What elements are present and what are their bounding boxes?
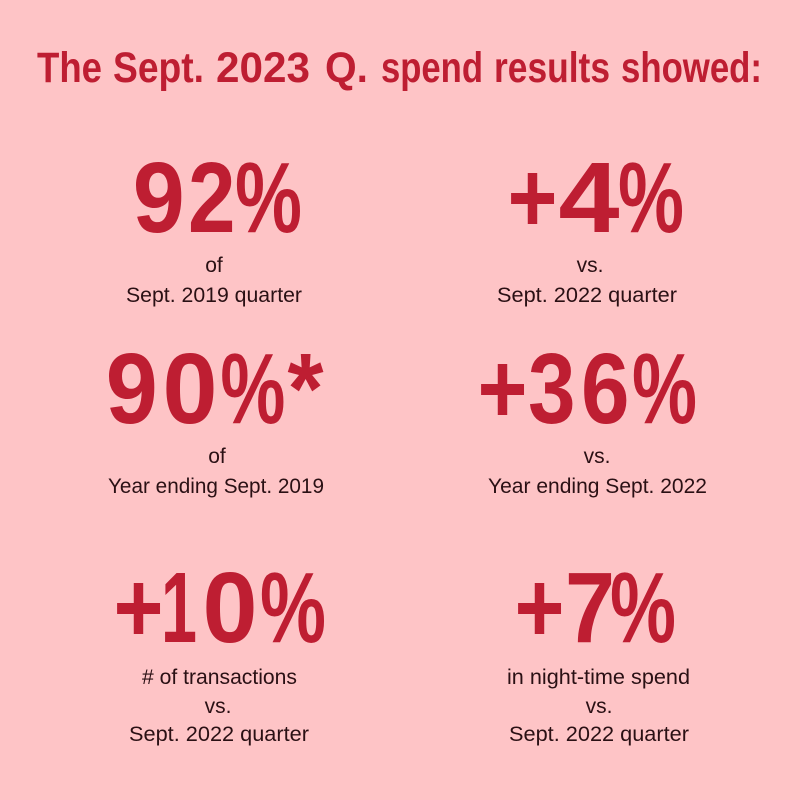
stat: +36% vs. Year ending Sept. 2022: % — [632, 333, 697, 445]
title: results — [494, 44, 610, 92]
title: showed: — [621, 44, 762, 92]
stat: 92% of Sept. 2019 quarter: of — [205, 254, 223, 277]
stat: 90%* of Year ending Sept. 2019: of — [208, 445, 226, 468]
stat: +4% vs. Sept. 2022 quarter: vs. — [577, 254, 603, 277]
stat: +7% in night-time spend vs. Sept. 2022 quarter — [507, 552, 690, 746]
stat: +10% # of transactions vs. Sept. 2022 quarter: vs. — [205, 695, 231, 718]
stat: 90%* of Year ending Sept. 2019: % — [220, 333, 285, 445]
stat: 90%* of Year ending Sept. 2019: Year ending Sept. 2019 — [108, 475, 324, 498]
stat: +10% # of transactions vs. Sept. 2022 quarter — [114, 552, 326, 746]
stat: +7% in night-time spend vs. Sept. 2022 quarter: in night-time spend — [507, 666, 690, 689]
title: Sept. — [113, 44, 204, 92]
stat: +10% # of transactions vs. Sept. 2022 quarter: % — [260, 552, 326, 664]
stat: 90%* of Year ending Sept. 2019: 0 — [162, 333, 218, 445]
stat: 92% of Sept. 2019 quarter: 2 — [188, 142, 236, 254]
stat: +7% in night-time spend vs. Sept. 2022 quarter: + — [514, 552, 564, 664]
stat: +7% in night-time spend vs. Sept. 2022 quarter: Sept. 2022 quarter — [509, 723, 689, 746]
stat: +36% vs. Year ending Sept. 2022: 6 — [581, 333, 630, 445]
stat: +4% vs. Sept. 2022 quarter: 4 — [558, 142, 620, 254]
stat: +4% vs. Sept. 2022 quarter: Sept. 2022 quarter — [497, 284, 677, 307]
stat: +10% # of transactions vs. Sept. 2022 quarter: 1 — [161, 552, 197, 664]
stat: 92% of Sept. 2019 quarter: Sept. 2019 quarter — [126, 284, 302, 307]
title: 2023 — [216, 44, 310, 92]
stat: 90%* of Year ending Sept. 2019 — [106, 333, 324, 498]
stat: 92% of Sept. 2019 quarter: % — [235, 142, 302, 254]
stat: +7% in night-time spend vs. Sept. 2022 quarter: 7 — [565, 552, 615, 664]
stat: 90%* of Year ending Sept. 2019: * — [288, 333, 324, 445]
stat: +7% in night-time spend vs. Sept. 2022 quarter: vs. — [586, 695, 612, 718]
title — [37, 44, 762, 92]
stat: +36% vs. Year ending Sept. 2022: vs. — [584, 445, 610, 468]
stat: +10% # of transactions vs. Sept. 2022 quarter: 0 — [202, 552, 258, 664]
title: Q. — [325, 44, 368, 92]
stat: +10% # of transactions vs. Sept. 2022 quarter: # of transactions — [142, 666, 297, 689]
stat: +4% vs. Sept. 2022 quarter: % — [618, 142, 684, 254]
stat: 92% of Sept. 2019 quarter: 9 — [133, 142, 185, 254]
stat: 90%* of Year ending Sept. 2019: 9 — [106, 333, 158, 445]
stat: +36% vs. Year ending Sept. 2022: 3 — [528, 333, 576, 445]
title: The — [37, 44, 102, 92]
stat: 92% of Sept. 2019 quarter — [126, 142, 302, 307]
stat: +7% in night-time spend vs. Sept. 2022 quarter: % — [610, 552, 676, 664]
stat: +4% vs. Sept. 2022 quarter: + — [508, 142, 558, 254]
title: spend — [381, 44, 483, 92]
stat: +4% vs. Sept. 2022 quarter — [497, 142, 684, 307]
stat: +36% vs. Year ending Sept. 2022: Year ending Sept. 2022 — [488, 475, 707, 498]
stat: +36% vs. Year ending Sept. 2022: + — [478, 333, 528, 445]
stat: +10% # of transactions vs. Sept. 2022 quarter: Sept. 2022 quarter — [129, 723, 309, 746]
stat: +36% vs. Year ending Sept. 2022 — [478, 333, 707, 498]
stat: +10% # of transactions vs. Sept. 2022 quarter: + — [114, 552, 164, 664]
